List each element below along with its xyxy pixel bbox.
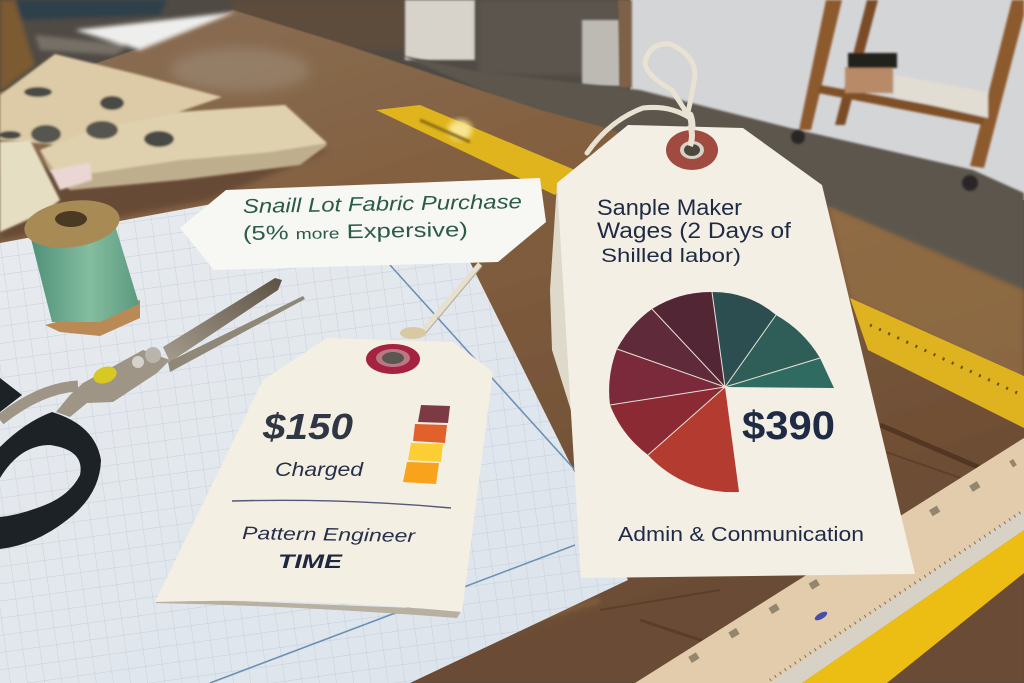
fabric swatches [0, 54, 327, 190]
eyelet [366, 344, 420, 374]
heading text [597, 195, 792, 267]
pattern engineer label: Pattern Engineer [242, 523, 417, 546]
top left desk clutter [0, 0, 235, 92]
colour swatches [403, 405, 450, 484]
pattern paper [0, 204, 628, 683]
divider [232, 500, 451, 508]
charged label: Charged [275, 460, 365, 481]
label text [243, 191, 522, 245]
admin label: Admin & Conmunication [618, 524, 864, 546]
string: small tag [400, 264, 482, 339]
yellow ruler, back [376, 105, 575, 195]
heading text: Wages (2 Days of [597, 218, 792, 243]
heading text: Shilled labor) [601, 246, 741, 267]
yellow ruler, right [850, 298, 1024, 428]
floor [400, 55, 1024, 300]
eyelet [666, 125, 718, 170]
label text: (5% more Expersive) [243, 219, 468, 245]
price: $150 [262, 406, 353, 447]
pie chart [609, 292, 834, 492]
small price tag [155, 338, 493, 618]
string [587, 44, 695, 153]
scissors [0, 278, 305, 549]
fabric roll [0, 140, 60, 232]
price: $390 [742, 404, 835, 448]
measuring rule, bottom right [635, 438, 1024, 683]
label text: Snaill Lot Fabric Purchase [243, 191, 522, 218]
large price tag [550, 44, 915, 578]
heading text: Sanple Maker [597, 195, 742, 220]
thread spool [21, 195, 140, 336]
tag: small lot fabric purchase [180, 178, 546, 270]
time label: TIME [278, 552, 344, 573]
shelf [791, 0, 1024, 191]
